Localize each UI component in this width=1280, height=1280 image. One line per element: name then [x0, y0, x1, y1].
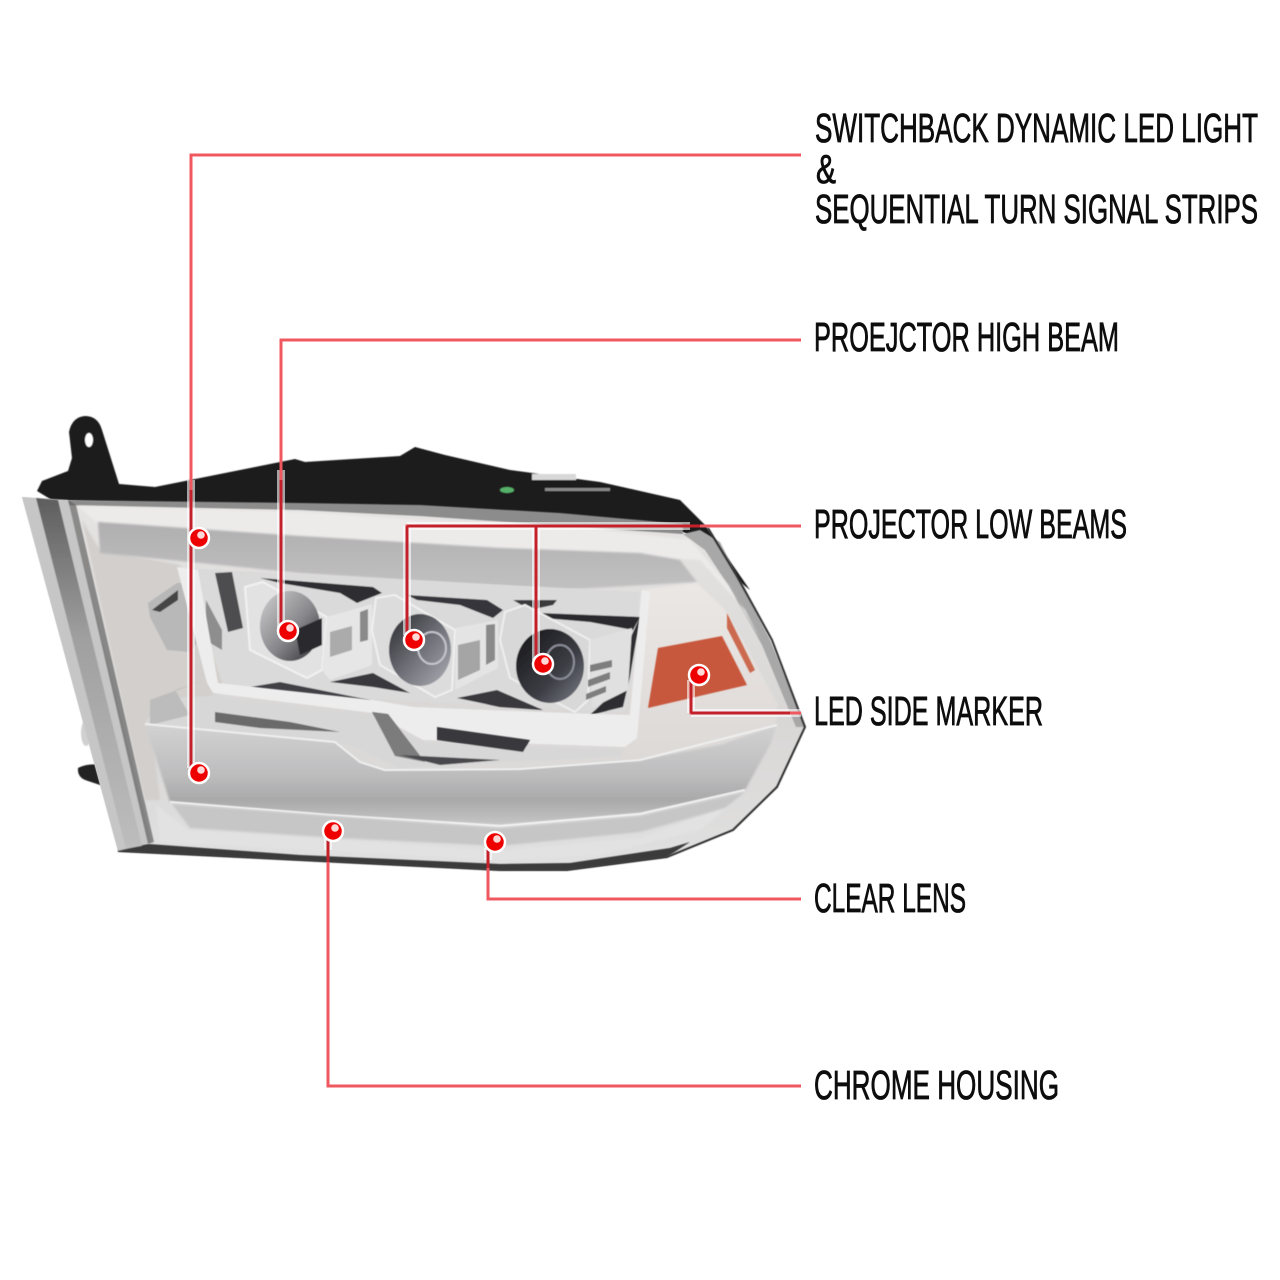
marker dots	[189, 528, 709, 852]
dot: low beam right	[533, 654, 553, 674]
right low beam housing	[500, 605, 590, 712]
chrome U-shaped light tube	[177, 567, 650, 747]
lower LED light strip	[145, 724, 777, 825]
dot: low beam middle	[404, 630, 424, 650]
chrome block 2	[455, 620, 498, 690]
label: switchback dynamic LED light and sequential turn signal strips: &	[816, 146, 836, 192]
dot: chrome housing	[323, 821, 343, 841]
label: clear lens: CLEAR LENS	[814, 875, 966, 921]
high beam housing	[245, 582, 327, 678]
label: switchback dynamic LED light and sequential turn signal strips	[815, 105, 1258, 232]
middle low beam housing	[372, 595, 455, 697]
middle low beam projector lens	[389, 614, 451, 686]
right lens rim	[683, 530, 805, 727]
chrome inner left panel	[82, 520, 225, 800]
dot: upper strip	[189, 528, 209, 548]
bottom dark trim	[118, 842, 690, 870]
high beam projector lens	[260, 591, 320, 661]
projector bay	[148, 568, 640, 715]
callout leader lines	[191, 155, 801, 1086]
left reflector	[148, 583, 197, 652]
dot: side marker	[689, 665, 709, 685]
upper LED light strip	[98, 522, 697, 590]
lower strip highlight lines	[145, 724, 777, 770]
dot: high beam	[278, 621, 298, 641]
leader: projector high beam	[281, 340, 801, 628]
dark upper reflections	[260, 578, 382, 603]
bottom chrome band	[156, 805, 730, 860]
label: chrome housing: CHROME HOUSING	[814, 1062, 1059, 1108]
chrome block 1	[322, 604, 372, 680]
leader: chrome housing	[328, 836, 801, 1086]
leader: projector low beams	[407, 526, 801, 660]
second light strip	[172, 792, 745, 846]
label: LED side marker: LED SIDE MARKER	[814, 688, 1043, 734]
lower chrome reflector	[145, 680, 625, 768]
left chrome edge band	[22, 497, 154, 851]
leader: clear lens	[488, 848, 801, 899]
upper grey band beneath housing	[60, 500, 683, 534]
leader: switchback strips	[191, 155, 801, 768]
leader: LED side marker	[691, 680, 801, 713]
chrome block 3	[590, 628, 632, 708]
headlight illustration	[22, 416, 805, 870]
dot: clear lens	[485, 832, 505, 852]
top chrome bezel	[78, 506, 760, 640]
lower dark reflections	[250, 682, 370, 708]
right chrome panel	[620, 583, 778, 770]
white line halos	[191, 470, 801, 860]
right low beam projector lens	[516, 629, 584, 703]
bay background	[180, 568, 640, 712]
clear lens body	[22, 497, 805, 870]
outer dark rim line	[118, 528, 805, 870]
mounting bracket and black rear housing	[37, 416, 750, 786]
amber LED side marker	[648, 613, 755, 708]
darker leader cores over the headlight	[191, 480, 790, 868]
dot: lower strip	[189, 763, 209, 783]
